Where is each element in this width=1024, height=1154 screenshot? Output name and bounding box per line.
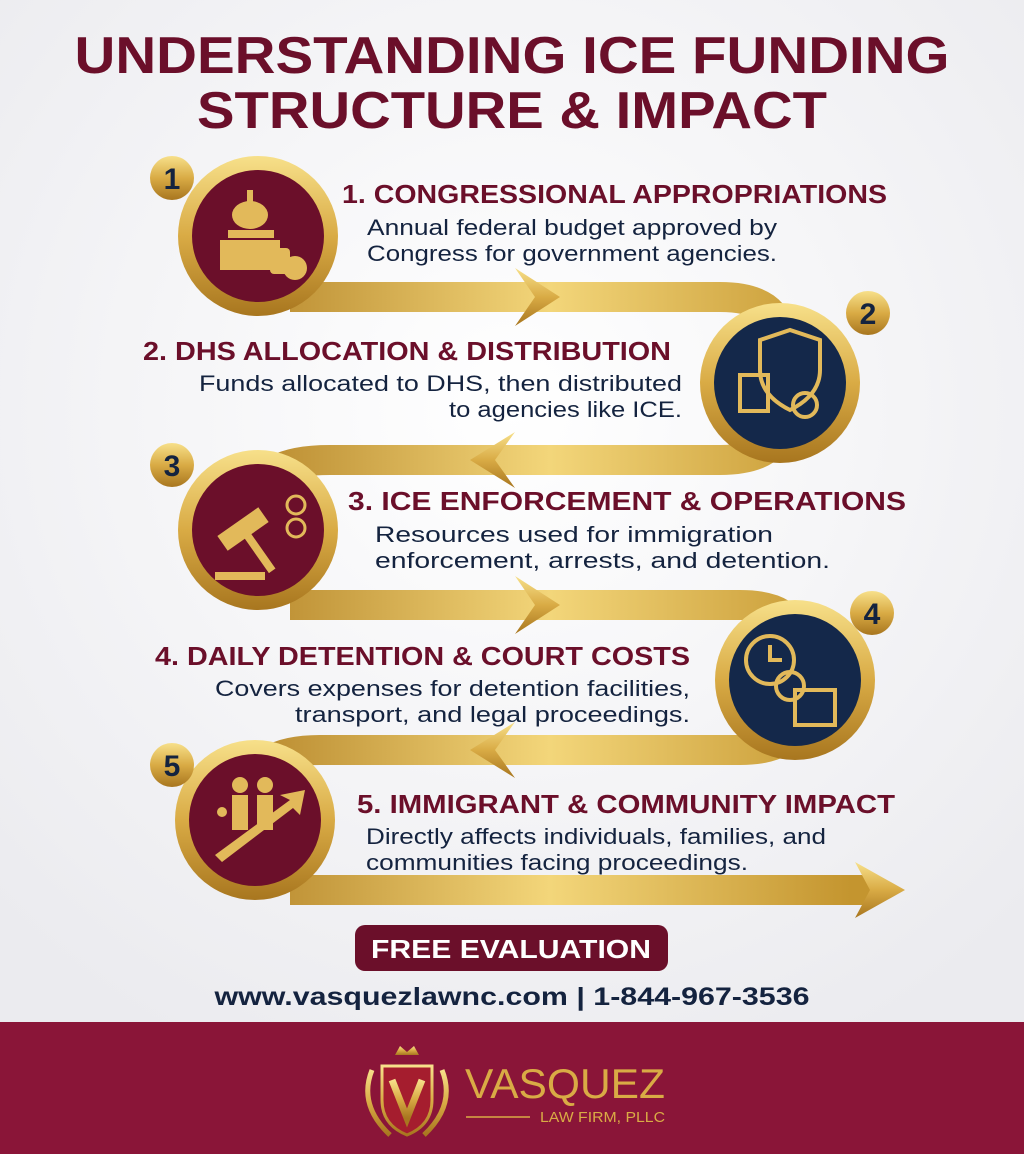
badge 5: 5 xyxy=(164,750,180,783)
badge 3 xyxy=(150,443,194,487)
badge 4: 4 xyxy=(864,598,881,631)
badge 2: 2 xyxy=(860,298,876,331)
badge 4 xyxy=(850,591,894,635)
circle 2 xyxy=(700,303,860,463)
title: UNDERSTANDING ICE FUNDING xyxy=(74,27,950,85)
step 5 text xyxy=(357,789,895,875)
step 4 text: transport, and legal proceedings. xyxy=(295,702,690,727)
circle 3 xyxy=(178,450,338,610)
step 1 text: 1. CONGRESSIONAL APPROPRIATIONS xyxy=(342,179,887,209)
step 5 text: communities facing proceedings. xyxy=(366,850,748,875)
badge 5 xyxy=(150,743,194,787)
circle 5 xyxy=(175,740,335,900)
badge 1: 1 xyxy=(164,163,180,196)
step 4 text: Covers expenses for detention facilities, xyxy=(215,676,690,701)
step 5 text: Directly affects individuals, families, and xyxy=(366,824,826,849)
step 2 text xyxy=(143,336,682,422)
arrows xyxy=(470,268,905,918)
title: STRUCTURE & IMPACT xyxy=(197,82,827,140)
circle 1 xyxy=(178,156,338,316)
step 1 text: Annual federal budget approved by xyxy=(367,215,777,240)
step 3 text: 3. ICE ENFORCEMENT & OPERATIONS xyxy=(348,486,906,516)
step 1 text xyxy=(342,179,887,266)
step 4 text xyxy=(155,641,690,727)
footer xyxy=(0,1022,1024,1154)
title xyxy=(74,27,950,140)
badge 2 xyxy=(846,291,890,335)
step 3 text: enforcement, arrests, and detention. xyxy=(375,548,830,573)
badge 3: 3 xyxy=(164,450,180,483)
button: free evaluation: FREE EVALUATION xyxy=(371,934,651,964)
step 4 text: 4. DAILY DETENTION & COURT COSTS xyxy=(155,641,690,671)
step 2 text: 2. DHS ALLOCATION & DISTRIBUTION xyxy=(143,336,671,366)
logo: VASQUEZ xyxy=(465,1060,665,1107)
ribbon path xyxy=(255,297,870,890)
logo xyxy=(368,1046,665,1135)
logo: LAW FIRM, PLLC xyxy=(540,1109,665,1126)
contact line: www.vasquezlawnc.com | 1-844-967-3536 xyxy=(213,983,810,1011)
step 3 text xyxy=(348,486,906,573)
step 5 text: 5. IMMIGRANT & COMMUNITY IMPACT xyxy=(357,789,895,819)
step 2 text: Funds allocated to DHS, then distributed xyxy=(199,371,682,396)
step 1 text: Congress for government agencies. xyxy=(367,241,777,266)
circle 4 xyxy=(715,600,875,760)
button: free evaluation xyxy=(355,925,668,971)
step 2 text: to agencies like ICE. xyxy=(449,397,682,422)
badge 1 xyxy=(150,156,194,200)
step 3 text: Resources used for immigration xyxy=(375,522,773,547)
